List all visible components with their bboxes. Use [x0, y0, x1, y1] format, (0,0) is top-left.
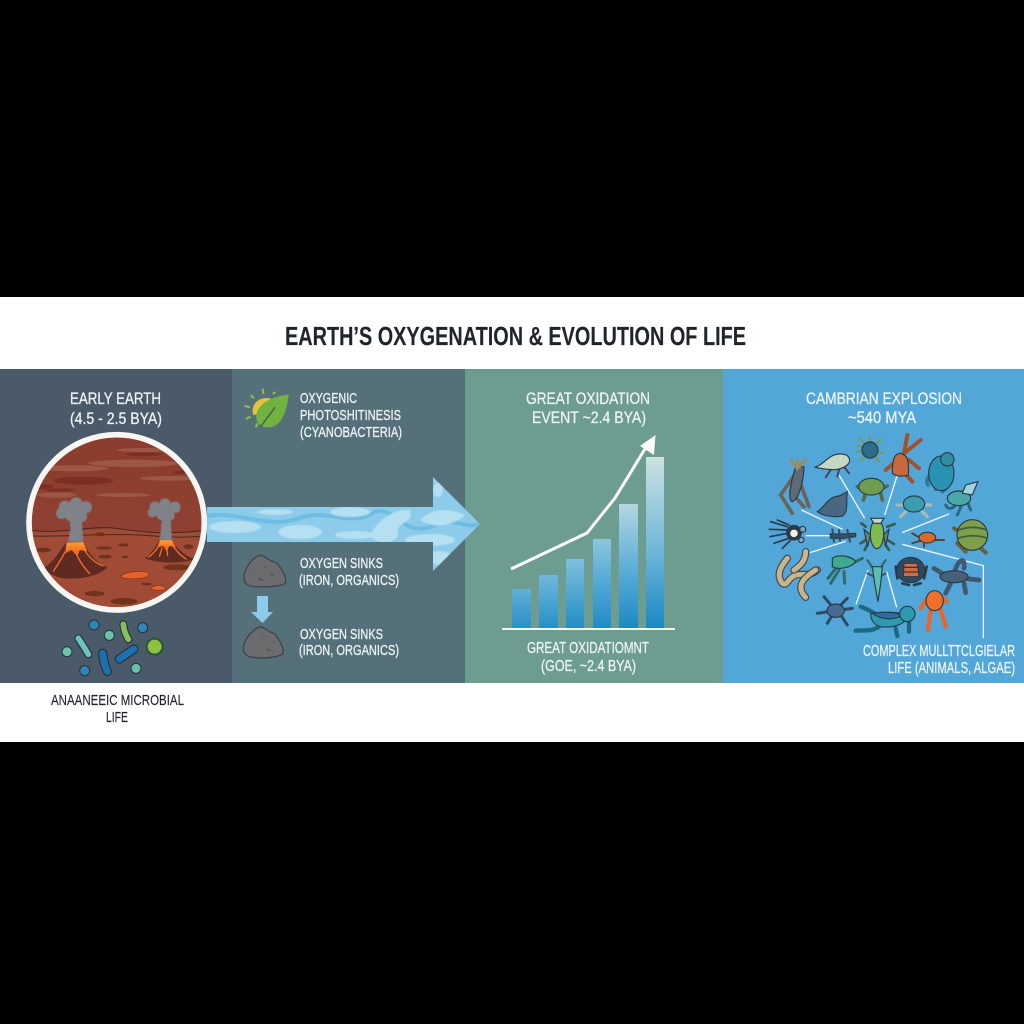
heading: great oxidation event: GREAT OXIDATION — [526, 389, 650, 408]
panel: great oxidation event — [465, 369, 723, 683]
creature: tentacled white eye — [769, 520, 806, 548]
caption: anaerobic microbial life — [51, 693, 184, 726]
icon: rock lower — [243, 627, 283, 658]
heading: early earth — [70, 389, 162, 428]
creature: grey long-legged — [781, 459, 809, 513]
connector lines — [801, 475, 983, 638]
text: oxygen sinks lower: OXYGEN SINKS — [300, 626, 383, 643]
creature: striped green shell — [954, 520, 988, 553]
title: EARTH’S OXYGENATION & EVOLUTION OF LIFE — [285, 321, 746, 351]
creature: teal lizard — [856, 606, 915, 636]
creature: dark blob — [817, 492, 847, 517]
creature: dark crab — [817, 597, 852, 625]
heading: early earth: (4.5 - 2.5 BYA) — [70, 409, 162, 428]
arrow: oxygen flow — [207, 477, 480, 571]
text: oxygenic photosynthesis: OXYGENIC — [300, 390, 357, 407]
bar chart: rising oxygen — [502, 457, 675, 630]
text: oxygenic photosynthesis: PHOTOSHITINESIS — [300, 407, 401, 424]
creature: green jellyfish — [828, 556, 862, 583]
heading: great oxidation event — [526, 389, 650, 427]
creature: sun-like radial — [857, 437, 883, 462]
text: oxygenic photosynthesis — [300, 390, 402, 441]
background band — [0, 297, 1024, 742]
volcano right — [145, 540, 195, 562]
text: oxygen sinks upper — [299, 555, 399, 589]
creature: orange crustacean — [886, 435, 921, 482]
text: chart caption: (GOE, ~2.4 BYA) — [541, 658, 636, 675]
creature: jelly squid — [946, 482, 978, 515]
caption: anaerobic microbial life: ANAANEEIC MICROBIAL — [51, 693, 184, 709]
heading: early earth: EARLY EARTH — [70, 389, 161, 408]
creature: shrimp vertical — [867, 560, 886, 602]
creature: olive turtle — [857, 478, 887, 500]
text: chart caption: GREAT OXIDATIOMNT — [527, 640, 649, 657]
creature: orange tall legs — [921, 591, 947, 630]
creatures — [769, 435, 988, 636]
heading: cambrian explosion: CAMBRIAN EXPLOSION — [806, 389, 962, 408]
text: oxygen sinks upper: OXYGEN SINKS — [300, 555, 383, 572]
lava pools — [120, 571, 167, 590]
icon: rock upper — [244, 555, 286, 587]
heading: cambrian explosion: ~540 MYA — [848, 408, 917, 427]
arrow: down to sink — [251, 596, 273, 623]
creature: teal turtle large — [927, 453, 954, 492]
diagram: radiating animal forms — [769, 435, 988, 638]
creature: blue crab — [897, 496, 931, 517]
illustration: volcanic early earth — [27, 433, 207, 613]
volcano left — [43, 542, 107, 579]
creature: pale seal — [815, 454, 850, 477]
creature: central arthropod — [861, 518, 895, 550]
text: oxygen sinks upper: (IRON, ORGANICS) — [299, 572, 399, 589]
text: oxygenic photosynthesis: (CYANOBACTERIA) — [300, 424, 402, 441]
heading: cambrian explosion — [806, 389, 962, 427]
panel: cambrian explosion — [723, 369, 1024, 683]
icon: leaf and sun — [245, 389, 289, 427]
text: complex multicellular life — [863, 643, 1015, 677]
icon: anaerobic microbes — [62, 620, 164, 676]
panel: oxygen production and sinks — [232, 369, 465, 683]
creature: orange beetle — [912, 532, 944, 547]
creature: slate lizard — [934, 560, 979, 593]
arrow: oxygen trend line — [511, 435, 656, 569]
text: oxygen sinks lower: (IRON, ORGANICS) — [299, 642, 399, 659]
creature: dark shrimp — [830, 529, 856, 542]
caption: anaerobic microbial life: LIFE — [106, 710, 128, 726]
text: oxygen sinks lower — [299, 626, 399, 659]
creature: orange striped bug — [896, 557, 927, 585]
panel: early earth — [0, 369, 232, 683]
creature: tan worms — [779, 552, 817, 597]
heading: great oxidation event: EVENT ~2.4 BYA) — [532, 408, 646, 427]
smoke plumes — [56, 497, 181, 542]
text: chart caption — [527, 640, 649, 675]
